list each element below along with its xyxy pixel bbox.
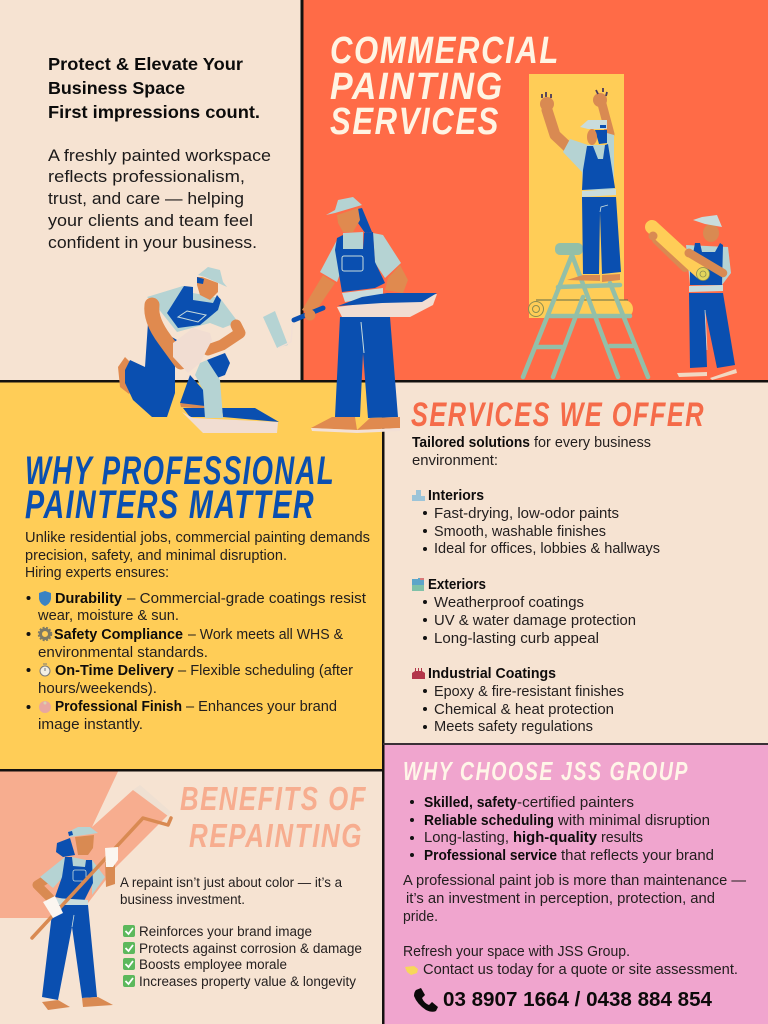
list: on-time delivery: hours/weekends).	[38, 681, 157, 697]
list: interiors: Interiors	[428, 488, 484, 504]
list: durability: wear, moisture & sun.	[37, 608, 179, 624]
text block: intro paragraph: A freshly painted workspace	[48, 147, 271, 165]
contact phone numbers: 03 8907 1664 / 0438 884 854	[443, 988, 713, 1011]
illustration: step ladder	[523, 243, 648, 377]
heading: benefits of repainting: REPAINTING	[189, 817, 363, 854]
text block: intro heading: Protect & Elevate Your	[48, 54, 243, 74]
text block: investment paragraph: pride.	[403, 909, 438, 925]
checklist: benefits: Reinforces your brand image	[139, 924, 312, 939]
text block: services intro: environment:	[412, 453, 498, 469]
text block: intro heading: Business Space	[48, 78, 185, 98]
list: JSS reasons: -certified painters	[517, 795, 634, 811]
list: durability: Durability	[55, 591, 122, 607]
panel: why professional painters matter background	[0, 381, 383, 770]
list: JSS reasons: Long-lasting,	[424, 830, 509, 846]
text block: intro paragraph: reflects professionalism,	[48, 168, 245, 186]
list: industrial coatings: Chemical & heat protection	[434, 702, 614, 718]
list: industrial coatings: Epoxy & fire-resistant finishes	[434, 684, 624, 700]
title: commercial painting services: COMMERCIAL	[330, 30, 560, 72]
list: industrial coatings: Industrial Coatings	[428, 666, 556, 682]
list: JSS reasons: with minimal disruption	[557, 813, 710, 829]
text block: investment paragraph: it’s an investment in perception, protection, and	[406, 891, 715, 907]
text block: call to action: Refresh your space with JSS Group.	[403, 944, 630, 960]
text block: why professional intro: precision, safety, and minimal disruption.	[25, 548, 287, 564]
heading: benefits of repainting	[180, 780, 367, 854]
text block: call to action	[403, 944, 738, 978]
text block: why professional intro: Unlike residential jobs, commercial painting demands	[25, 530, 370, 546]
text block: why professional intro: Hiring experts ensures:	[25, 565, 169, 581]
text block: intro paragraph	[48, 147, 271, 252]
panel: why choose JSS background	[383, 744, 768, 1024]
list: industrial coatings: Meets safety regulations	[434, 719, 593, 735]
checklist: benefits: Protects against corrosion & damage	[139, 941, 362, 956]
text block: intro paragraph: trust, and care — helping	[48, 190, 244, 208]
title: commercial painting services	[330, 30, 560, 143]
checklist: benefits	[123, 924, 362, 989]
list: JSS reasons: results	[601, 830, 643, 846]
list: professional finish: Professional Finish	[55, 699, 182, 715]
text block: benefits intro: business investment.	[120, 892, 245, 907]
heading: why professional painters matter	[25, 449, 335, 527]
text block: services intro	[412, 435, 651, 469]
list: professional finish: – Enhances your brand	[186, 699, 337, 715]
text block: investment paragraph	[403, 873, 746, 925]
list: exteriors: Long-lasting curb appeal	[434, 631, 599, 647]
list: JSS reasons: Skilled, safety	[424, 795, 517, 811]
list: exteriors: UV & water damage protection	[434, 613, 636, 629]
list: interiors: Fast-drying, low-odor paints	[434, 506, 619, 522]
list: industrial coatings	[412, 666, 624, 735]
heading: why professional painters matter: PAINTERS MATTER	[25, 483, 315, 527]
list: JSS reasons: high-quality	[513, 830, 597, 846]
heading: why professional painters matter: WHY PROFESSIONAL	[25, 449, 335, 493]
list: exteriors: Weatherproof coatings	[434, 595, 584, 611]
list: JSS reasons: Reliable scheduling	[424, 813, 554, 829]
list: on-time delivery	[26, 663, 353, 697]
illustration: peach painted wall strip	[0, 772, 170, 918]
list: durability: – Commercial-grade coatings resist	[127, 591, 366, 607]
illustration: worker painting wall on ladder	[540, 88, 621, 282]
list: professional finish	[26, 699, 337, 733]
text block: services intro: Tailored solutions	[412, 435, 530, 451]
text block: benefits intro	[120, 875, 342, 907]
list: exteriors: Exteriors	[428, 577, 486, 593]
list: safety compliance: – Work meets all WHS &	[188, 627, 343, 643]
list: JSS reasons: Professional service	[424, 848, 557, 864]
text block: services intro: for every business	[534, 435, 651, 451]
list: JSS reasons: that reflects your brand	[561, 848, 714, 864]
list: interiors: Ideal for offices, lobbies & hallways	[434, 541, 660, 557]
list: on-time delivery: – Flexible scheduling (after	[178, 663, 353, 679]
checklist: benefits: Boosts employee morale	[139, 957, 287, 972]
title: commercial painting services: PAINTING	[330, 66, 504, 108]
list: durability	[26, 591, 366, 624]
illustration: worker carrying roll	[648, 215, 737, 380]
illustration: yellow painted wall strip	[528, 74, 633, 318]
text block: why professional intro	[25, 530, 370, 581]
list: safety compliance: Safety Compliance	[54, 627, 183, 643]
list: exteriors	[412, 577, 636, 647]
list: interiors	[412, 488, 660, 557]
list: safety compliance: environmental standards.	[38, 645, 208, 661]
panel: hero orange	[302, 0, 768, 381]
text block: intro paragraph: confident in your business.	[48, 234, 257, 252]
heading: benefits of repainting: BENEFITS OF	[180, 780, 367, 817]
text block: intro heading: First impressions count.	[48, 102, 260, 122]
text block: benefits intro: A repaint isn’t just about color — it’s a	[120, 875, 342, 890]
illustration: kneeling worker pouring paint	[118, 267, 288, 433]
illustration: worker with long paint roller	[32, 785, 171, 1010]
title: commercial painting services: SERVICES	[330, 101, 500, 143]
illustration: standing worker with roller and tray	[278, 197, 437, 433]
text block: call to action: Contact us today for a quote or site assessment.	[423, 962, 738, 978]
text block: investment paragraph: A professional paint job is more than maintenance —	[403, 873, 746, 889]
icon: phone	[414, 988, 438, 1012]
checklist: benefits: Increases property value & longevity	[139, 974, 356, 989]
list: safety compliance	[26, 627, 343, 661]
list: interiors: Smooth, washable finishes	[434, 524, 606, 540]
list: on-time delivery: On-Time Delivery	[55, 663, 174, 679]
list: JSS reasons	[410, 795, 714, 864]
list: professional finish: image instantly.	[38, 717, 143, 733]
text block: intro paragraph: your clients and team feel	[48, 212, 253, 230]
text block: intro heading	[48, 54, 260, 122]
